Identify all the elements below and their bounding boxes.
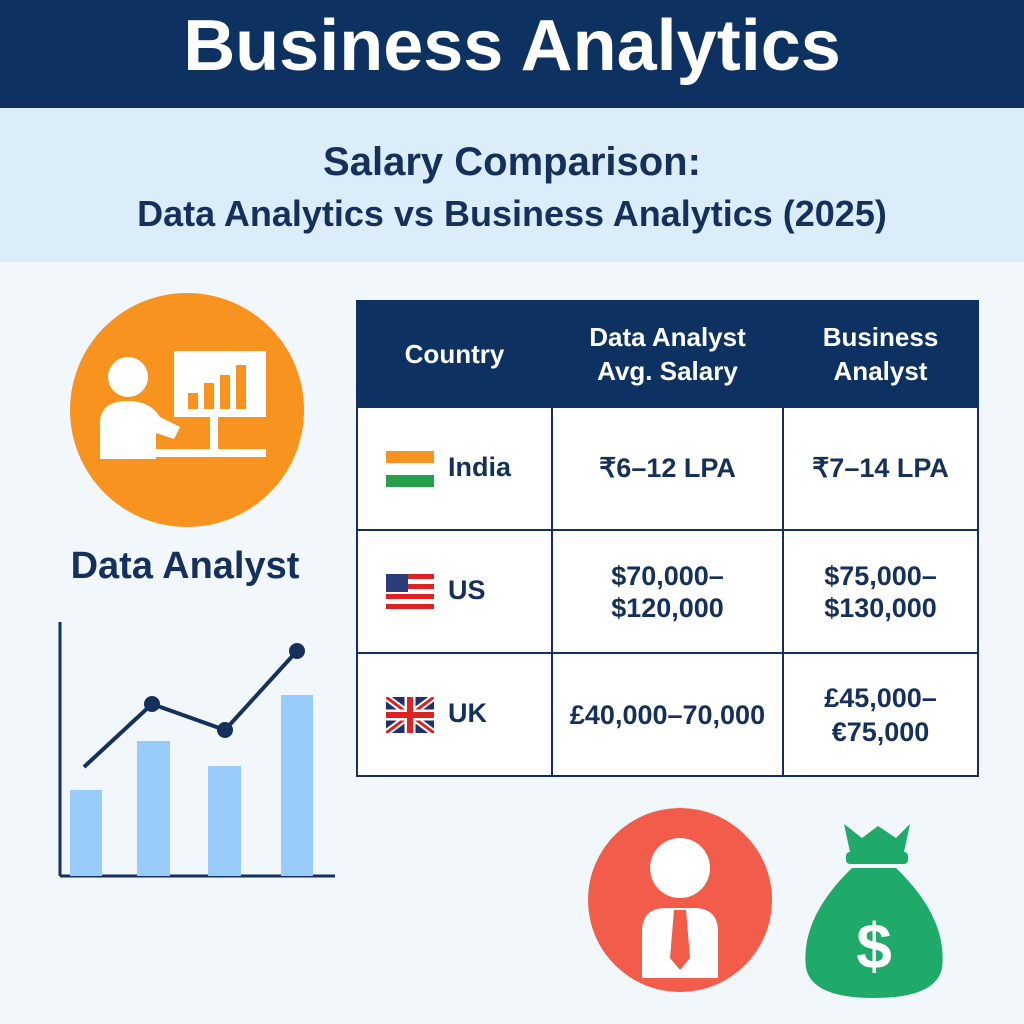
salary table	[356, 300, 979, 777]
salary table: Country	[405, 338, 504, 368]
subtitle band	[0, 108, 1024, 262]
salary table: $70,000–	[611, 560, 724, 590]
icon: money bag: $	[856, 910, 892, 982]
subtitle band: Salary Comparison:	[323, 140, 701, 184]
salary table: $75,000–	[824, 560, 937, 590]
salary table: US	[448, 575, 486, 605]
salary table: ₹7–14 LPA	[812, 453, 949, 483]
salary table: India	[448, 452, 511, 482]
salary table: Business	[823, 322, 938, 352]
title banner: Business Analytics	[183, 6, 841, 86]
chart: bars and line	[58, 622, 335, 878]
salary table: ₹6–12 LPA	[599, 453, 736, 483]
title banner	[0, 0, 1024, 108]
salary table: $120,000	[611, 592, 724, 622]
salary table: €75,000	[832, 716, 929, 746]
icon: data analyst orange circle	[70, 293, 304, 527]
heading: Data Analyst: Data Analyst	[71, 545, 299, 587]
salary table: $130,000	[824, 592, 937, 622]
salary table: £45,000–	[824, 682, 937, 712]
icon: business analyst red circle	[588, 808, 772, 992]
salary table: £40,000–70,000	[570, 700, 765, 730]
subtitle band: Data Analytics vs Business Analytics (2025)	[137, 193, 887, 234]
salary table: UK	[448, 698, 487, 728]
salary table: Analyst	[834, 356, 927, 386]
salary table: Data Analyst	[589, 322, 746, 352]
salary table: Avg. Salary	[597, 356, 738, 386]
icon: money bag	[805, 824, 943, 998]
